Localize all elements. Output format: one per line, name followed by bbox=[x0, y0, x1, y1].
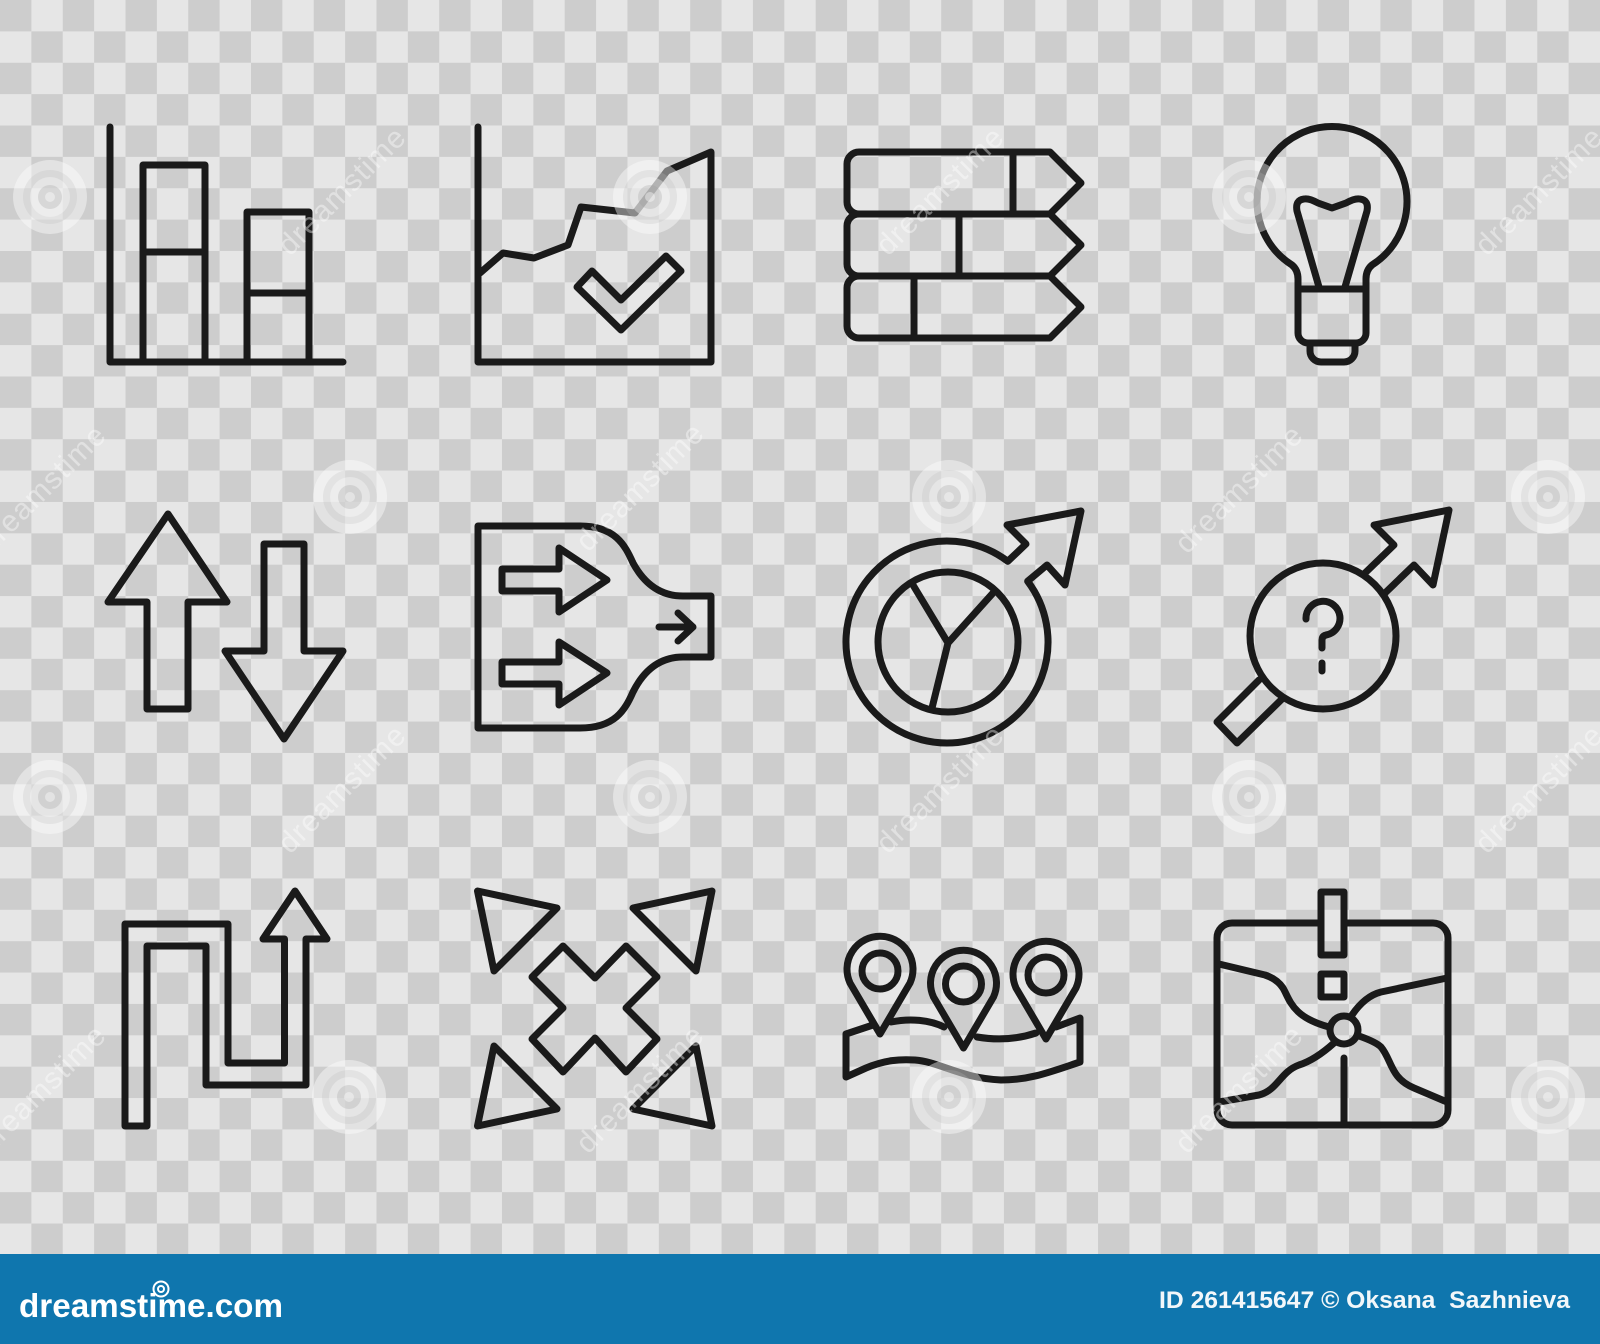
icon: map with three location pins bbox=[846, 936, 1080, 1080]
icon: funnel with arrows bbox=[478, 526, 711, 728]
watermark: diagonal wordmarks: dreamstime bbox=[1169, 419, 1309, 560]
icon: road map with alert mark bbox=[1217, 892, 1448, 1125]
icon: winding route arrow bbox=[125, 891, 327, 1126]
icons bbox=[108, 127, 1449, 1126]
watermark: diagonal wordmarks: dreamstime bbox=[570, 417, 710, 558]
icon: up and down arrows bbox=[108, 514, 343, 739]
watermark: diagonal wordmarks: dreamstime bbox=[272, 719, 412, 860]
icon: pie chart with growth arrow bbox=[846, 511, 1081, 743]
icon: area chart with check mark bbox=[478, 127, 711, 362]
watermark: diagonal wordmarks: dreamstime bbox=[570, 1019, 710, 1160]
footer logo text: dreamstime.com bbox=[19, 1287, 283, 1324]
icon: expand arrows around cross bbox=[478, 891, 712, 1126]
icon: light bulb bbox=[1257, 127, 1407, 362]
footer image id and author credit: ID 261415647 © Oksana Sazhnieva bbox=[1159, 1287, 1571, 1314]
footer band bbox=[0, 1254, 1600, 1344]
watermark: diagonal wordmarks: dreamstime bbox=[1169, 1019, 1309, 1160]
watermark: diagonal wordmarks bbox=[0, 121, 1600, 1160]
icon: three stacked arrow bars bbox=[847, 152, 1081, 338]
icon: footer spiral bbox=[154, 1282, 168, 1296]
icon: magnifier question arrow bbox=[1217, 510, 1449, 743]
watermark: spiral logos bbox=[13, 160, 1585, 1134]
watermark: diagonal wordmarks: dreamstime bbox=[870, 121, 1010, 262]
watermark: diagonal wordmarks: dreamstime bbox=[870, 719, 1010, 860]
icon: stacked bar chart bbox=[110, 127, 343, 362]
watermark: diagonal wordmarks: dreamstime bbox=[272, 121, 412, 262]
